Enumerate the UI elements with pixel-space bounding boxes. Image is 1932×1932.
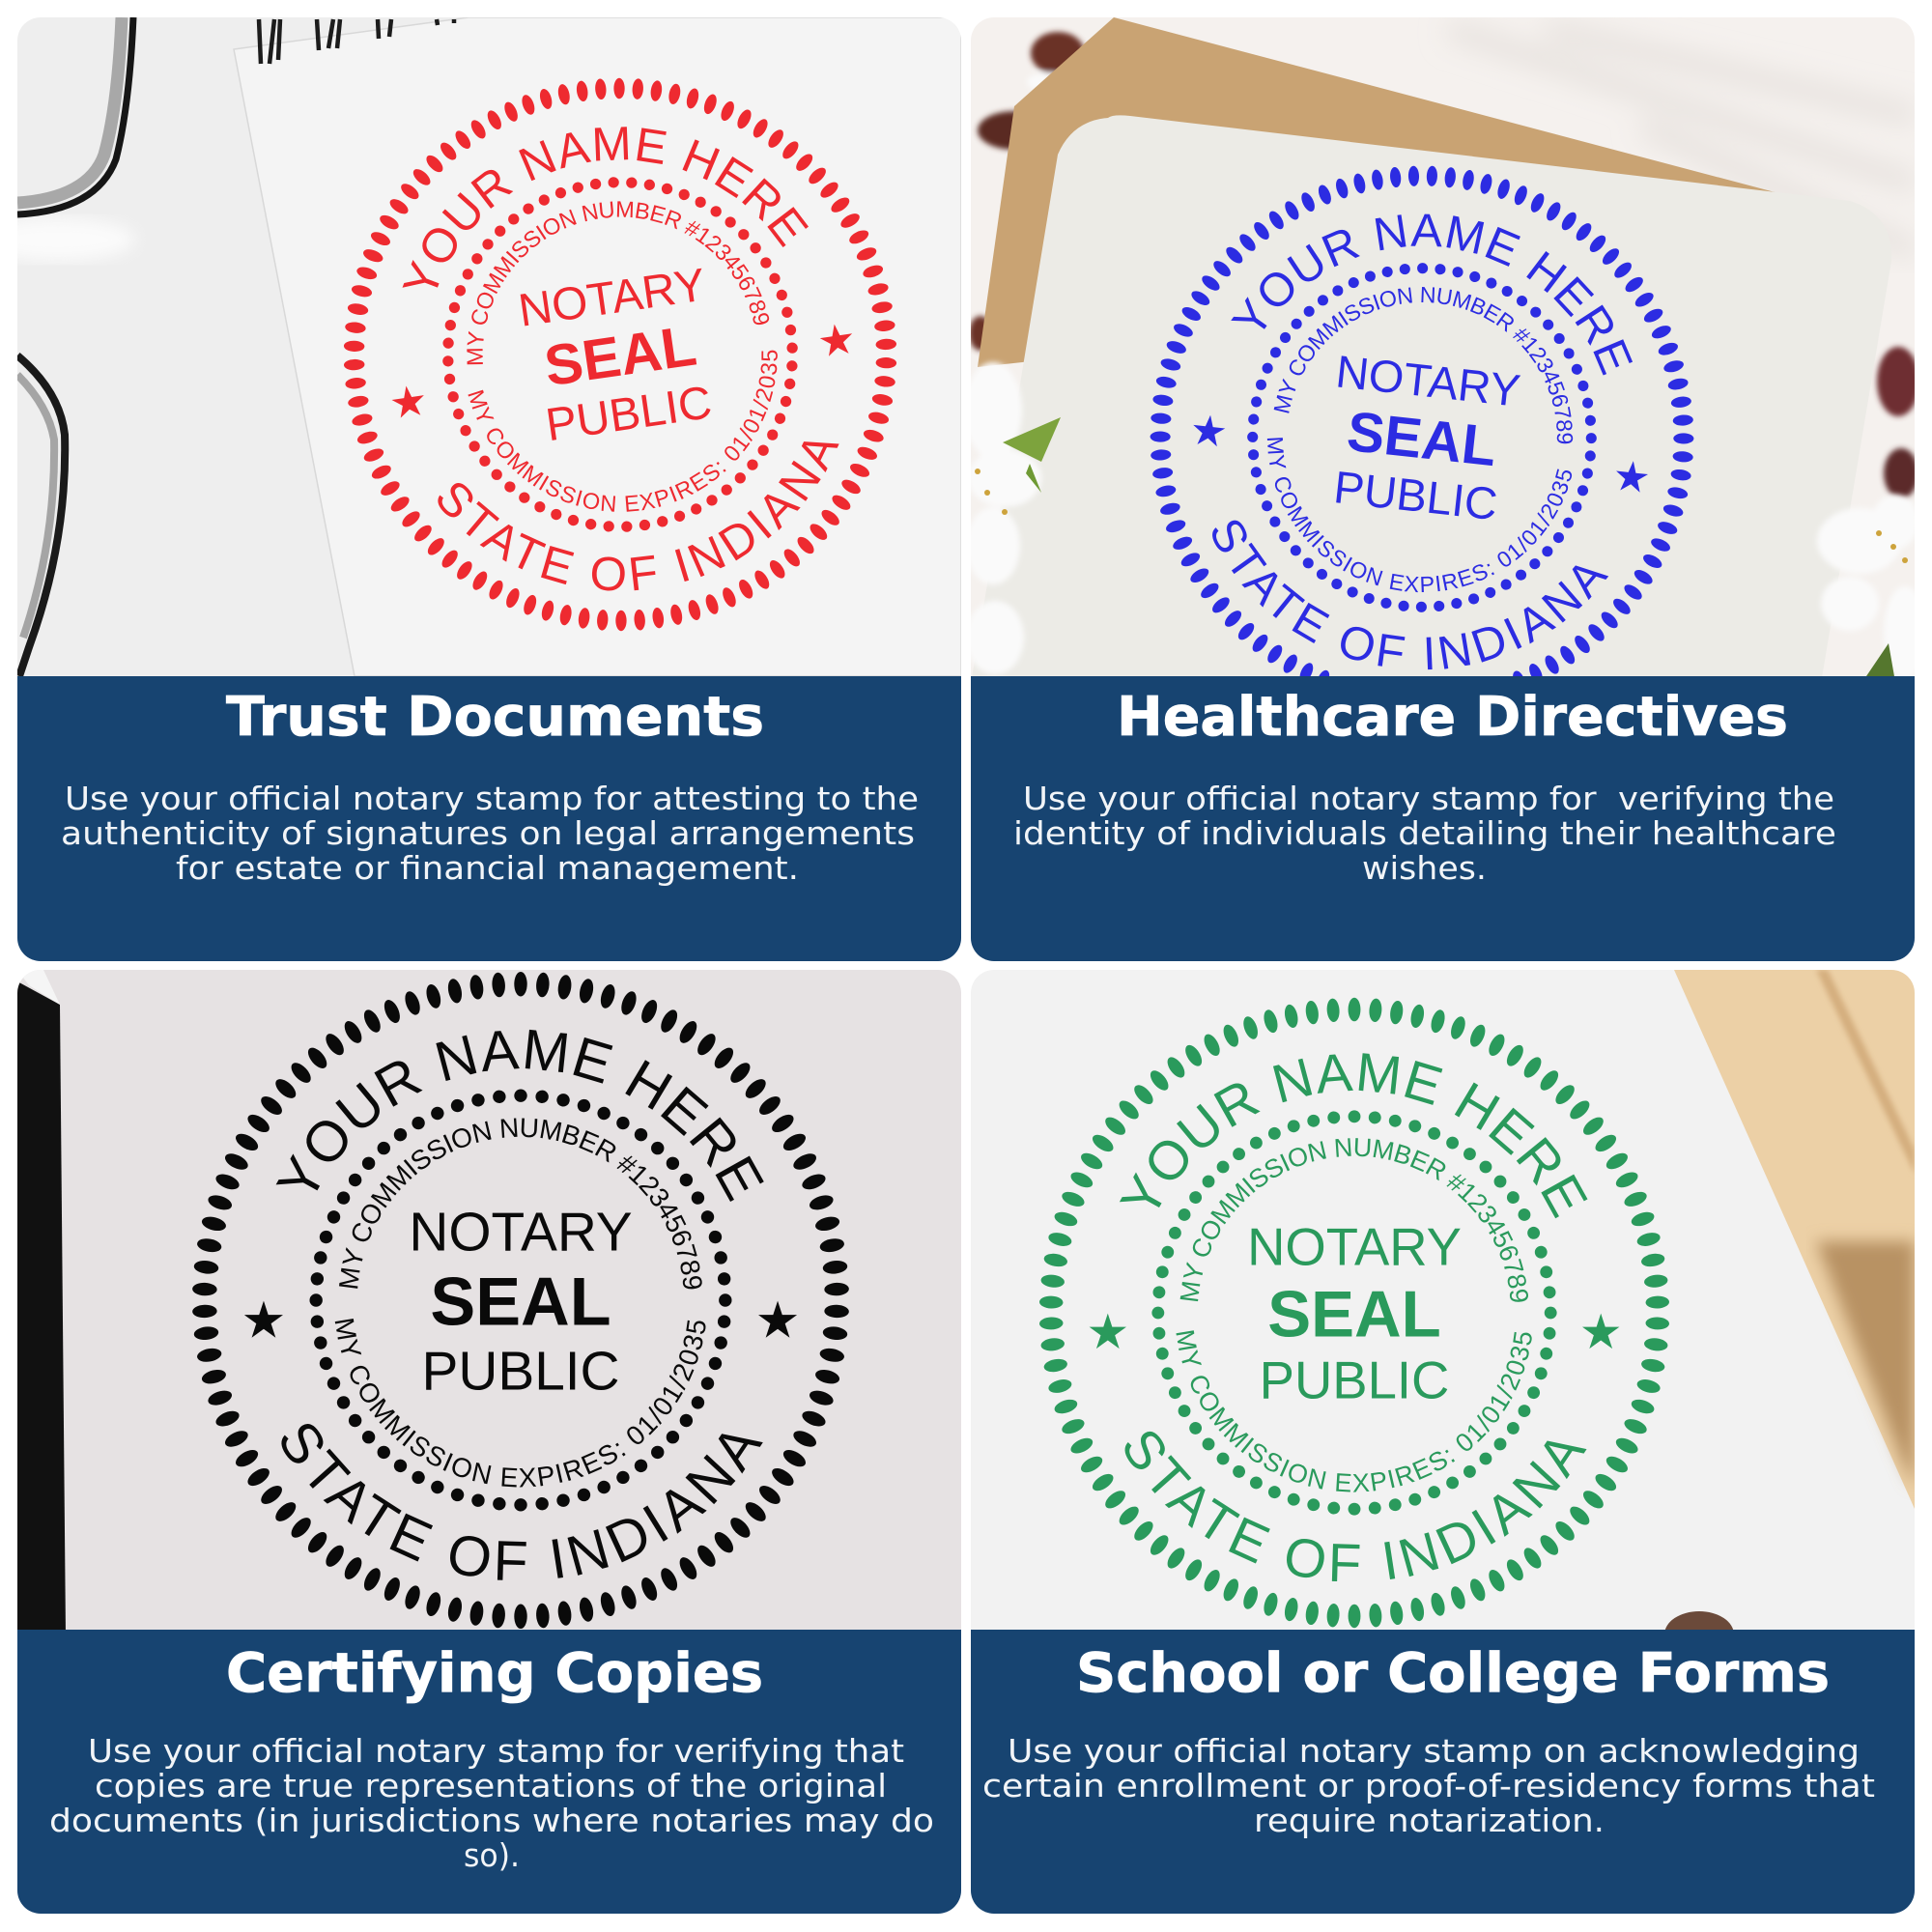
body text — [1013, 780, 1836, 887]
body text: for estate or financial management. — [176, 849, 799, 887]
stamp: black notary seal — [192, 972, 849, 1629]
body text — [49, 1732, 934, 1874]
heading: Healthcare Directives — [1117, 686, 1788, 749]
body text: Use your official notary stamp for verifying the — [1023, 780, 1834, 817]
stamp: black notary seal: YOUR NAME HERE — [276, 1030, 764, 1202]
stamp: green notary seal: SEAL — [1267, 1278, 1441, 1350]
photo: notepad and glasses on desk — [0, 17, 961, 684]
stamp: green notary seal: MY COMMISSION NUMBER #123456789 — [1180, 1138, 1528, 1302]
panel: certifying copies — [17, 970, 961, 1914]
body text: wishes. — [1362, 849, 1487, 887]
stamp: red notary seal: YOUR NAME HERE — [402, 127, 809, 288]
panel: healthcare directives — [971, 17, 1915, 961]
stamp: blue notary seal — [1150, 166, 1694, 676]
stamp: blue notary seal: STATE OF INDIANA — [1212, 520, 1609, 670]
body text: so). — [464, 1836, 520, 1874]
photo: white paper on wood and burlap — [971, 970, 1915, 1658]
body text: Use your official notary stamp for verifying that — [88, 1732, 904, 1770]
stamp: blue notary seal: NOTARY — [1333, 345, 1522, 416]
body text: copies are true representations of the original — [95, 1767, 887, 1804]
stamp: black notary seal: PUBLIC — [421, 1342, 620, 1403]
stamp: green notary seal: NOTARY — [1247, 1217, 1462, 1276]
stamp: black notary seal: STATE OF INDIANA — [281, 1424, 763, 1580]
stamp: green notary seal: MY COMMISSION EXPIRES: 01/01/2035 — [1177, 1330, 1532, 1492]
stamp: black notary seal: MY COMMISSION NUMBER #123456789 — [339, 1119, 702, 1289]
stamp: black notary seal: SEAL — [430, 1264, 611, 1340]
heading: School or College Forms — [1076, 1642, 1830, 1705]
photo: envelope, card and blossoms — [964, 17, 1926, 684]
caption panel: school or college forms — [971, 1630, 1915, 1914]
stamp: green notary seal — [1039, 997, 1669, 1629]
body text: require notarization. — [1254, 1802, 1605, 1839]
body text: certain enrollment or proof-of-residency forms that — [982, 1767, 1875, 1804]
photo: paper with black binder edge — [17, 970, 961, 1636]
body text — [982, 1732, 1875, 1839]
stamp: red notary seal: MY COMMISSION EXPIRES: 01/01/2035 — [468, 350, 778, 512]
stamp: blue notary seal: PUBLIC — [1331, 461, 1500, 529]
body text: documents (in jurisdictions where notaries may do — [49, 1802, 934, 1839]
stamp: red notary seal — [344, 77, 896, 632]
stamp: blue notary seal: MY COMMISSION EXPIRES: 01/01/2035 — [1267, 438, 1573, 593]
body text: Use your official notary stamp for attesting to the — [65, 780, 919, 817]
panel: trust documents — [17, 17, 961, 961]
panel: school or college forms — [971, 970, 1915, 1914]
stamp: red notary seal: NOTARY — [515, 259, 709, 337]
stamp: red notary seal: STATE OF INDIANA — [438, 441, 839, 591]
heading: Certifying Copies — [226, 1642, 763, 1705]
stamp: green notary seal: YOUR NAME HERE — [1119, 1053, 1588, 1219]
caption panel: certifying copies — [17, 1630, 961, 1914]
body text: authenticity of signatures on legal arrangements — [61, 814, 915, 852]
stamp: red notary seal: PUBLIC — [543, 377, 715, 451]
stamp: black notary seal: NOTARY — [409, 1202, 633, 1263]
body text: Use your official notary stamp on acknowledging — [1008, 1732, 1860, 1770]
stamp: blue notary seal: MY COMMISSION NUMBER #123456789 — [1273, 287, 1573, 444]
caption panel: healthcare directives — [971, 676, 1915, 961]
stamp: green notary seal: PUBLIC — [1260, 1351, 1449, 1410]
heading: Trust Documents — [226, 686, 764, 749]
stamp: blue notary seal: SEAL — [1344, 400, 1499, 478]
stamp: green notary seal: STATE OF INDIANA — [1124, 1432, 1586, 1581]
stamp: red notary seal: MY COMMISSION NUMBER #123456789 — [467, 201, 769, 365]
stamp: blue notary seal: YOUR NAME HERE — [1231, 214, 1633, 375]
caption panel: trust documents — [17, 676, 961, 961]
body text: identity of individuals detailing their healthcare — [1013, 814, 1836, 852]
stamp: black notary seal: MY COMMISSION EXPIRES: 01/01/2035 — [334, 1319, 705, 1488]
stamp: red notary seal: SEAL — [541, 314, 700, 398]
body text — [61, 780, 919, 887]
